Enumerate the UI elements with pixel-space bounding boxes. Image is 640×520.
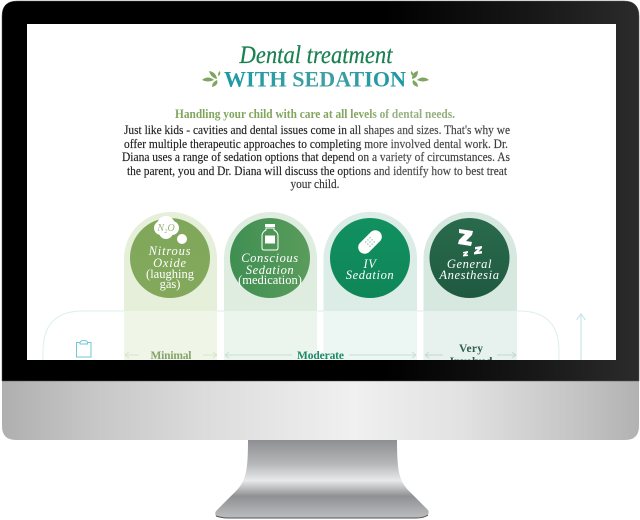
intro paragraph: your child. [290, 176, 340, 191]
icon: left leaf sprig [202, 71, 220, 87]
arrow: vertical scale [576, 314, 586, 360]
panel: general anesthesia [424, 212, 517, 360]
title script line: Dental treatment [239, 42, 393, 69]
monitor silver chin [2, 381, 639, 440]
scale: very involved [424, 344, 516, 360]
scale: very involved: Involved [450, 356, 493, 368]
circle [130, 218, 210, 298]
label: Nitrous [148, 244, 191, 258]
intro paragraph [122, 122, 510, 191]
arch [424, 212, 517, 311]
arch lower band [124, 311, 217, 360]
label: Sedation [246, 263, 294, 277]
arch lower band [324, 311, 417, 360]
icon: sleeping Zs [458, 229, 482, 256]
circle [330, 218, 410, 298]
subheading: Handling your child with care at all levels of dental needs. [175, 107, 455, 121]
label: Conscious [241, 251, 299, 265]
label: IV [362, 257, 377, 271]
label [438, 260, 498, 279]
title main line: WITH SEDATION [224, 66, 406, 92]
label [238, 251, 302, 287]
panel: nitrous oxide [124, 212, 217, 360]
label: (laughing [146, 267, 195, 281]
icon: right leaf sprig [411, 71, 429, 87]
intro paragraph: Just like kids - cavities and dental issues come in all shapes and sizes. That's why we [124, 122, 510, 137]
icon: medicine bottle [262, 224, 278, 250]
icon: clipboard [76, 340, 91, 357]
scale: very involved: Very [459, 343, 483, 355]
scale: moderate: Moderate [297, 350, 344, 362]
label: Anesthesia [438, 268, 500, 282]
intro paragraph: Diana uses a range of sedation options that depend on a variety of circumstances. As [122, 149, 510, 164]
label: (medication) [238, 273, 302, 287]
label: Oxide [153, 256, 187, 270]
arch [224, 212, 317, 311]
rounded chart frame [43, 311, 559, 360]
scale: minimal: Minimal [150, 350, 192, 362]
arch [124, 212, 217, 311]
circle [430, 218, 510, 298]
label [346, 260, 394, 279]
label: gas) [160, 277, 180, 291]
arch lower band [224, 311, 317, 360]
screen content [43, 42, 586, 368]
monitor black bezel [2, 1, 639, 381]
label: General [447, 257, 492, 271]
panel: IV sedation [324, 212, 417, 360]
circle [230, 218, 310, 298]
scale: moderate [224, 351, 416, 359]
monitor stand [215, 440, 429, 518]
arch [324, 212, 417, 311]
intro paragraph: the parent, you and Dr. Diana will discuss the options and identify how to best treat [127, 163, 507, 178]
intro paragraph: offer multiple therapeutic approaches to completing more involved dental work. Dr. [124, 136, 508, 151]
screen [27, 24, 616, 360]
label [146, 244, 195, 291]
icon: bandage [358, 230, 382, 254]
panel: conscious sedation [224, 212, 317, 360]
icon: N2O cloud [154, 216, 187, 244]
label: Sedation [346, 268, 394, 282]
icon: N2O cloud: N₂O [156, 223, 175, 234]
arch lower band [424, 311, 517, 360]
title [224, 45, 406, 87]
scale: minimal [124, 351, 218, 359]
